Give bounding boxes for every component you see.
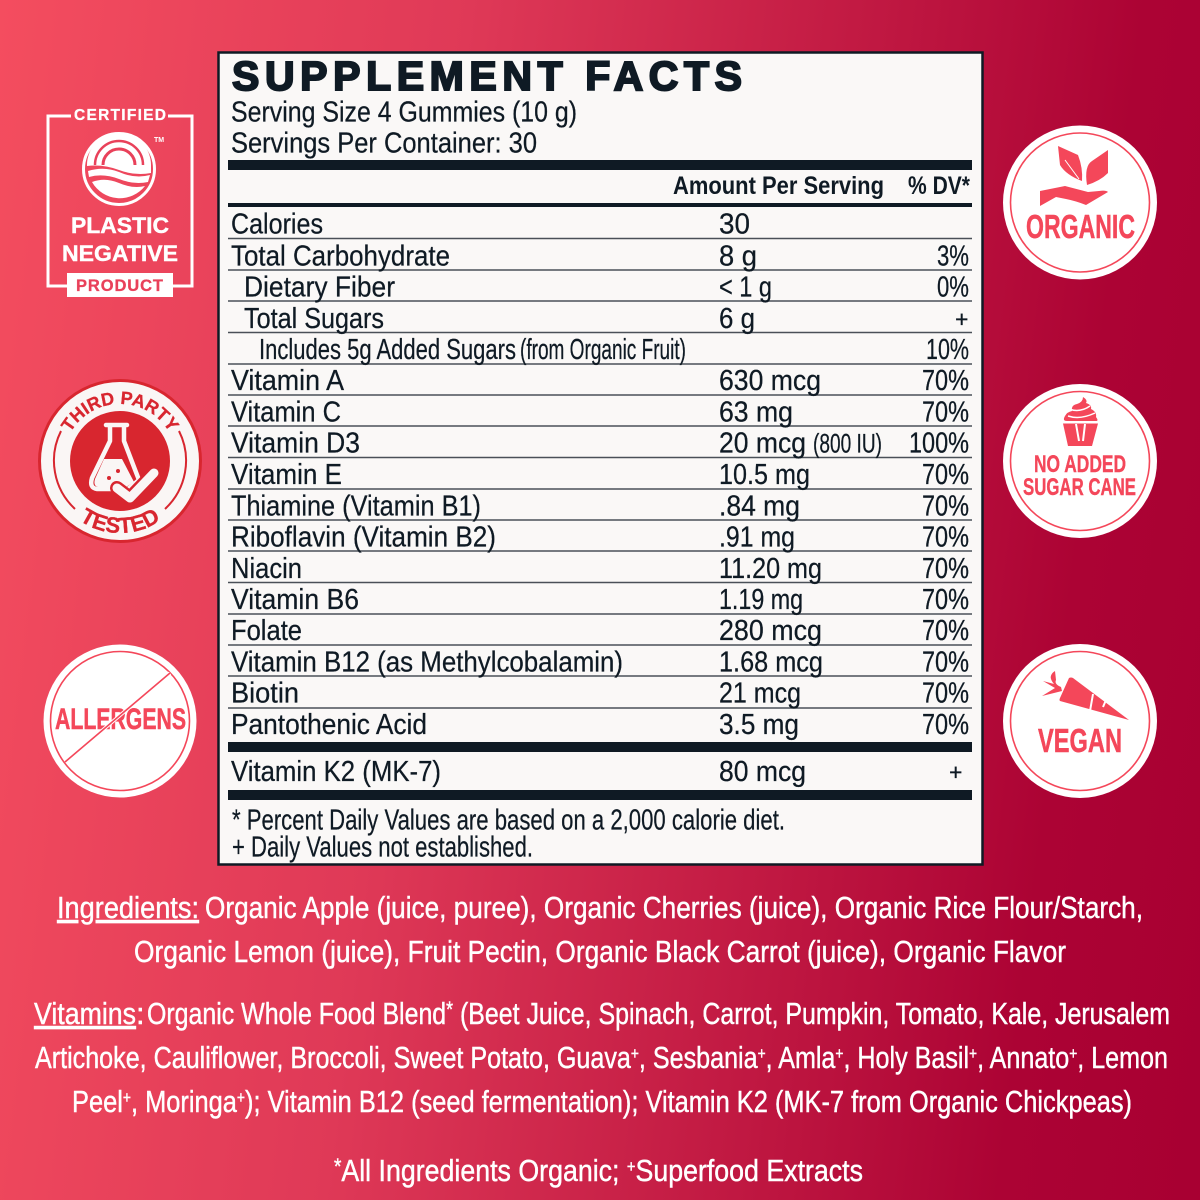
- footnote: organic and superfood: *: [334, 1154, 342, 1179]
- badge: third party tested: [38, 379, 202, 543]
- nutrient table rows: .91 mg: [719, 522, 795, 554]
- icon: flask with check mark: [91, 425, 154, 498]
- nutrient table rows: 70%: [922, 615, 969, 647]
- serving information: Serving Size 4 Gummies (10 g): [231, 96, 577, 128]
- nutrient table rows: Thiamine (Vitamin B1): [231, 490, 481, 522]
- ingredients text: [57, 890, 1143, 969]
- footnote: organic and superfood: All Ingredients Organic;: [341, 1153, 627, 1188]
- nutrient table rows: 70%: [922, 584, 969, 616]
- badge: no allergens: ALLERGENS: [55, 703, 186, 736]
- footnote: organic and superfood: [334, 1153, 863, 1188]
- nutrient table rows: 70%: [922, 490, 969, 522]
- vitamins text: +: [237, 1088, 245, 1107]
- table header: % DV*: [908, 172, 970, 200]
- table header: Amount Per Serving: [673, 172, 884, 200]
- nutrient table rows: 10%: [926, 334, 969, 366]
- nutrient table rows: 0%: [937, 272, 969, 304]
- serving information: [231, 96, 577, 160]
- nutrient table rows: Folate: [231, 615, 302, 647]
- vitamins text: , Lemon: [1077, 1040, 1168, 1075]
- footnote: organic and superfood: Superfood Extracts: [635, 1153, 863, 1188]
- panel: supplement facts: [218, 52, 982, 864]
- nutrient table rows: Pantothenic Acid: [231, 709, 427, 741]
- badge: no added sugar cane: SUGAR CANE: [1023, 474, 1136, 501]
- nutrient table rows: .84 mg: [719, 490, 800, 522]
- vitamins text: , Moringa: [131, 1084, 237, 1119]
- footnotes: * Percent Daily Values are based on a 2,000 calorie diet.: [232, 804, 785, 836]
- nutrient table rows: [228, 208, 972, 800]
- icon: carrot: [1042, 671, 1129, 720]
- vitamins text: +: [1069, 1044, 1077, 1063]
- vitamins text: +: [969, 1044, 977, 1063]
- vitamins text: , Annato: [977, 1040, 1069, 1075]
- nutrient table rows: 30: [719, 208, 750, 240]
- icon: cupcake: [1063, 397, 1098, 446]
- nutrient table rows: Total Carbohydrate: [231, 240, 450, 272]
- nutrient table rows: Dietary Fiber: [244, 272, 395, 304]
- vitamins text: +: [758, 1044, 766, 1063]
- nutrient table rows: Vitamin B6: [231, 584, 359, 616]
- vitamins text: +: [123, 1088, 131, 1107]
- badge: certified plastic negative product: PLASTIC: [71, 213, 169, 238]
- vitamins text: Artichoke, Cauliflower, Broccoli, Sweet Potato, Guava: [35, 1040, 771, 1075]
- table header: [228, 160, 972, 207]
- nutrient table rows: 70%: [922, 522, 969, 554]
- nutrient table rows: 280 mcg: [719, 615, 822, 647]
- badge: third party tested: THIRD PARTY: [60, 391, 180, 430]
- nutrient table rows: 8 g: [719, 240, 757, 272]
- serving information: Servings Per Container: 30: [231, 128, 537, 160]
- vitamins text: *: [446, 997, 453, 1022]
- nutrient table rows: 3.5 mg: [719, 709, 799, 741]
- nutrient table rows: 20 mcg: [719, 428, 806, 460]
- nutrient table rows: 100%: [909, 428, 969, 460]
- nutrient table rows: 630 mcg: [719, 365, 821, 397]
- footnotes: [232, 804, 785, 864]
- nutrient table rows: Vitamin B12 (as Methylcobalamin): [231, 646, 623, 678]
- nutrient table rows: 1.68 mcg: [719, 646, 823, 678]
- nutrient table rows: < 1 g: [719, 272, 772, 304]
- vitamins text: [34, 996, 1170, 1119]
- vitamins text: Vitamins: [34, 996, 136, 1031]
- badge: vegan: VEGAN: [1038, 722, 1122, 759]
- badge: organic: [1003, 126, 1157, 280]
- badge: no allergens: [44, 644, 196, 798]
- nutrient table rows: 70%: [922, 459, 969, 491]
- nutrient table rows: 70%: [922, 678, 969, 710]
- badge: certified plastic negative product: CERTIFIED: [74, 107, 166, 124]
- vitamins text: +: [631, 1044, 639, 1063]
- vitamins text: , Sesbania: [639, 1040, 758, 1075]
- badge: certified plastic negative product: PRODUCT: [76, 277, 163, 295]
- nutrient table rows: 70%: [922, 553, 969, 585]
- nutrient table rows: Biotin: [231, 678, 299, 710]
- badge: certified plastic negative product: TM: [154, 137, 164, 144]
- nutrient table rows: 80 mcg: [719, 756, 806, 788]
- vitamins text: :: [136, 996, 145, 1031]
- nutrient table rows: Vitamin A: [231, 365, 345, 397]
- icon: hand with leaves: [1040, 146, 1108, 206]
- nutrient table rows: Vitamin E: [231, 459, 342, 491]
- nutrient table rows: 63 mg: [719, 396, 793, 428]
- badge: no added sugar cane: [1003, 384, 1157, 538]
- vitamins text: +: [835, 1044, 844, 1063]
- badge: organic: ORGANIC: [1026, 208, 1135, 245]
- footnotes: + Daily Values not established.: [232, 832, 533, 864]
- nutrient table rows: +: [949, 759, 962, 785]
- heading: supplement facts: SUPPLEMENT FACTS: [232, 53, 742, 99]
- nutrient table rows: Vitamin K2 (MK-7): [231, 756, 441, 788]
- badge: certified plastic negative product: [48, 107, 192, 297]
- nutrient table rows: 70%: [922, 365, 969, 397]
- nutrient table rows: Total Sugars: [244, 303, 384, 335]
- badge: vegan: [1003, 644, 1157, 798]
- footnote: organic and superfood: +: [627, 1157, 636, 1176]
- vitamins text: Organic Whole Food Blend: [147, 996, 519, 1031]
- nutrient table rows: 21 mcg: [719, 678, 801, 710]
- nutrient table rows: Calories: [231, 208, 323, 240]
- vitamins text: , Holy Basil: [843, 1040, 969, 1075]
- nutrient table rows: 70%: [922, 396, 969, 428]
- nutrient table rows: Vitamin D3: [231, 428, 360, 460]
- nutrient table rows: 70%: [922, 709, 969, 741]
- nutrient table rows: Includes 5g Added Sugars: [259, 334, 516, 366]
- nutrient table rows: +: [955, 306, 968, 332]
- nutrient table rows: 70%: [922, 646, 969, 678]
- ingredients text: Organic Lemon (juice), Fruit Pectin, Organic Black Carrot (juice), Organic Flavor: [134, 934, 1066, 969]
- nutrient table rows: 3%: [937, 240, 969, 272]
- ingredients text: Ingredients:: [57, 890, 199, 925]
- nutrient table rows: Riboflavin (Vitamin B2): [231, 522, 496, 554]
- nutrient table rows: (800 IU): [813, 428, 882, 458]
- nutrient table rows: 1.19 mg: [719, 584, 803, 616]
- nutrient table rows: 11.20 mg: [719, 553, 822, 585]
- nutrient table rows: Vitamin C: [231, 396, 341, 428]
- nutrient table rows: (from Organic Fruit): [520, 334, 686, 366]
- nutrient table rows: Niacin: [231, 553, 302, 585]
- nutrient table rows: 6 g: [719, 303, 755, 335]
- nutrient table rows: 10.5 mg: [719, 459, 810, 491]
- badge: third party tested: TESTED: [83, 507, 158, 533]
- badge: no added sugar cane: NO ADDED: [1034, 451, 1126, 478]
- vitamins text: Peel: [72, 1084, 134, 1119]
- vitamins text: , Amla: [766, 1040, 836, 1075]
- badge: certified plastic negative product: NEGATIVE: [62, 241, 178, 266]
